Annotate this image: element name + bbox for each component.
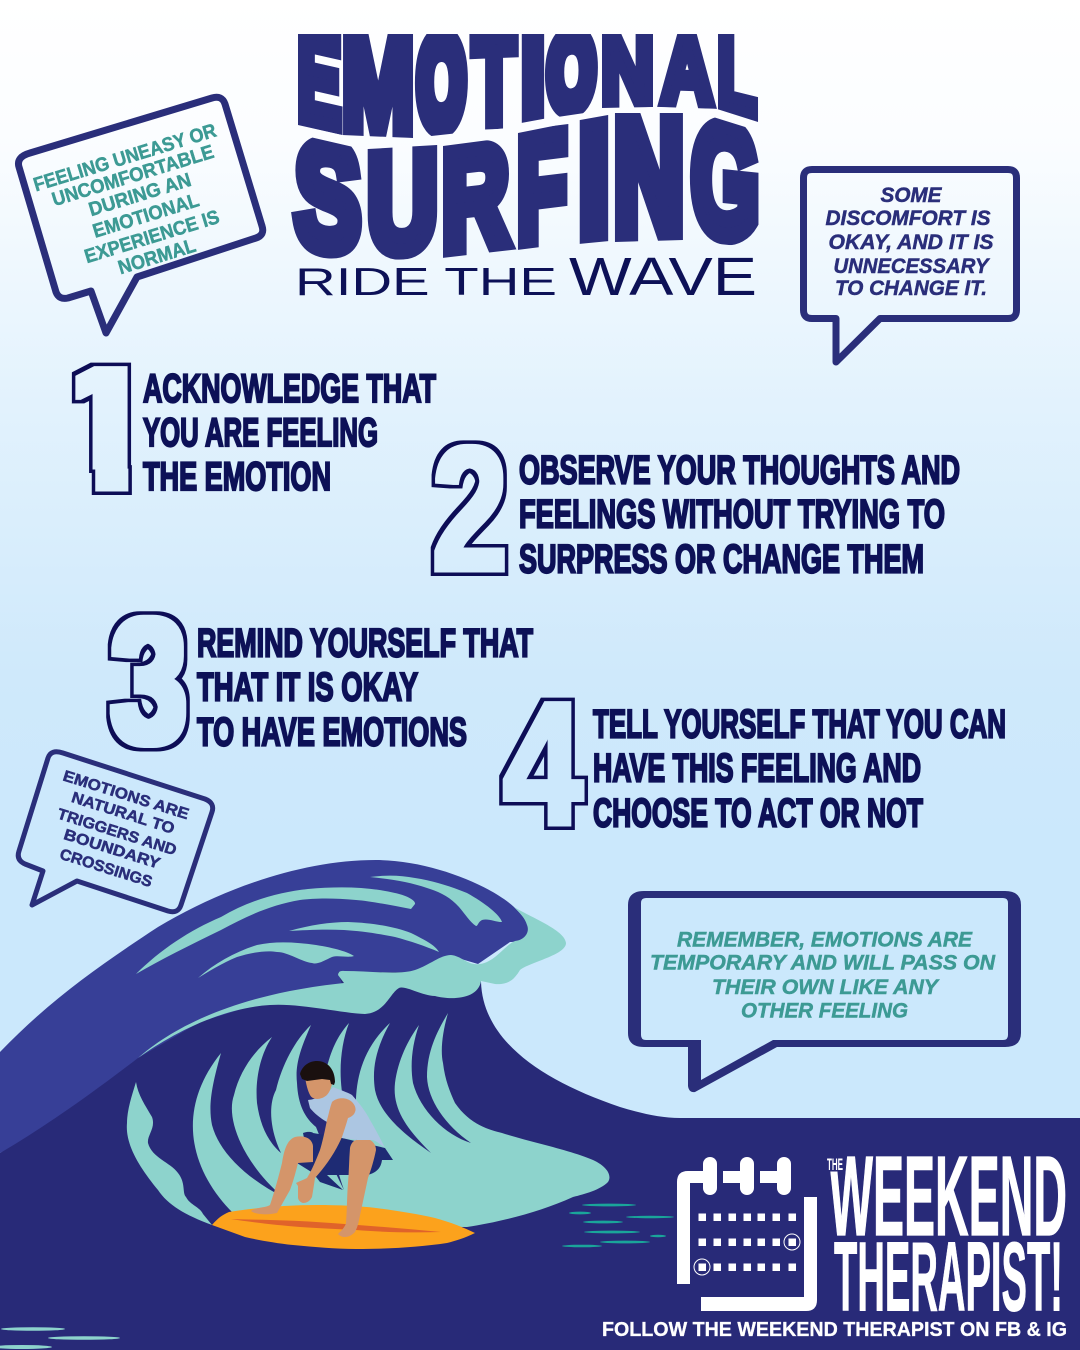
speech bubble: remember emotions are temporary: THEIR OWN LIKE ANY [712, 975, 940, 999]
crest foam band [138, 907, 566, 1058]
foam streaks [136, 876, 502, 978]
speech bubble: emotions are natural: TRIGGERS AND [55, 806, 179, 859]
word: SURFING: U [367, 119, 438, 282]
wave illustration [0, 860, 1080, 1350]
logo: The Weekend Therapist [677, 1133, 1067, 1332]
step 4 [503, 665, 1006, 861]
speech bubble: some discomfort: DISCOMFORT IS [826, 207, 990, 230]
word: SURFING: F [517, 100, 567, 274]
wordmark: THE [827, 1155, 843, 1174]
surfboard [212, 1205, 475, 1249]
speech bubble: some discomfort [804, 170, 1016, 362]
number 1: 1 [44, 331, 166, 526]
word: SURFING [291, 113, 759, 260]
speech bubble: some discomfort: TO CHANGE IT. [835, 277, 987, 300]
title: Emotional Surfing Ride the Wave [291, 34, 759, 296]
water streaks right [562, 1204, 674, 1247]
word: EMOTIONAL: T [472, 11, 516, 150]
speech bubble: feeling uneasy: EMOTIONAL [90, 189, 202, 243]
speech bubble: feeling uneasy: EXPERIENCE IS [82, 206, 222, 268]
word: EMOTIONAL: M [342, 9, 414, 159]
speech bubble: feeling uneasy: FEELING UNEASY OR [31, 120, 219, 196]
front arm [296, 1098, 356, 1203]
number 2: 2 [432, 411, 508, 608]
speech bubble: emotions are natural: EMOTIONS ARE [61, 768, 191, 823]
subtitle: RIDE THE WAVE: WAVE [569, 247, 757, 307]
word: EMOTIONAL: E [297, 1, 341, 155]
number 3: 3 [111, 584, 187, 779]
number 4: 4 [503, 665, 583, 861]
shirt [308, 1087, 385, 1148]
shorts [297, 1132, 393, 1190]
word: EMOTIONAL: N [601, 15, 654, 123]
word: SURFING: R [442, 115, 509, 281]
step 1 [72, 362, 436, 495]
speech bubble: remember emotions are temporary [628, 891, 1021, 1092]
wordmark [826, 1133, 1067, 1332]
speech bubble: emotions are natural: CROSSINGS [58, 846, 154, 891]
word: SURFING: I [578, 86, 610, 270]
sea: dark wave body [0, 960, 1080, 1350]
word: EMOTIONAL: O [418, 10, 465, 156]
face [305, 1076, 333, 1099]
speech bubble: some discomfort: SOME [880, 184, 942, 207]
speech bubble: emotions are natural: BOUNDARY [62, 826, 163, 873]
subtitle: RIDE THE WAVE: RIDE THE [295, 261, 557, 304]
front leg [338, 1140, 376, 1237]
word: EMOTIONAL: L [717, 3, 756, 140]
step 3 text: TO HAVE EMOTIONS [197, 710, 467, 754]
step 3 text [197, 622, 533, 754]
word: SURFING: S [295, 110, 361, 283]
step 3 text: THAT IT IS OKAY [197, 666, 418, 710]
speech bubble: feeling uneasy: DURING AN [86, 169, 194, 221]
speech bubble: remember emotions are temporary: TEMPORARY AND WILL PASS ON [650, 950, 995, 974]
speech bubble: feeling uneasy: NORMAL [116, 235, 199, 279]
step 1 text [143, 367, 436, 499]
speech bubble: some discomfort: UNNECESSARY [834, 255, 990, 278]
step 4 text [593, 702, 1006, 836]
step 2 [432, 411, 960, 608]
icon: calendar [677, 1157, 817, 1311]
step 1 text: THE EMOTION [143, 455, 331, 499]
surfboard stringer [231, 1219, 441, 1232]
back leg [251, 1136, 313, 1214]
subtitle: RIDE THE WAVE [295, 247, 757, 307]
speech bubble: emotions are natural: NATURAL TO [69, 789, 176, 838]
step 3 [111, 584, 533, 779]
speech bubble: feeling uneasy: UNCOMFORTABLE [49, 141, 217, 211]
word: SURFING: N [614, 83, 684, 268]
word: EMOTIONAL: O [548, 7, 595, 135]
speech bubble: feeling uneasy [18, 97, 263, 333]
surfer [251, 1061, 393, 1237]
word: EMOTIONAL [298, 34, 758, 138]
footer follow line: FOLLOW THE WEEKEND THERAPIST ON FB & IG [602, 1319, 1067, 1341]
word: SURFING: G [691, 89, 759, 272]
step 1 text: YOU ARE FEELING [143, 411, 378, 455]
word: EMOTIONAL: A [661, 16, 713, 125]
speech bubble: remember emotions are temporary: REMEMBER, EMOTIONS ARE [677, 928, 973, 952]
step 4 text: HAVE THIS FEELING AND [593, 746, 921, 790]
tube water with fingers [127, 1013, 609, 1227]
step 1 text: ACKNOWLEDGE THAT [143, 367, 436, 411]
word: EMOTIONAL: I [521, 9, 545, 141]
water streaks bottom left [0, 1327, 120, 1349]
step 4 text: CHOOSE TO ACT OR NOT [593, 792, 923, 836]
hair [300, 1061, 335, 1085]
wave crest [0, 860, 528, 1153]
speech bubble: some discomfort: OKAY, AND IT IS [828, 231, 994, 254]
step 2 text [519, 448, 960, 582]
speech bubble: remember emotions are temporary: OTHER FEELING [741, 998, 908, 1022]
speech bubble: emotions are natural [18, 752, 213, 912]
step 3 text: REMIND YOURSELF THAT [197, 622, 533, 666]
